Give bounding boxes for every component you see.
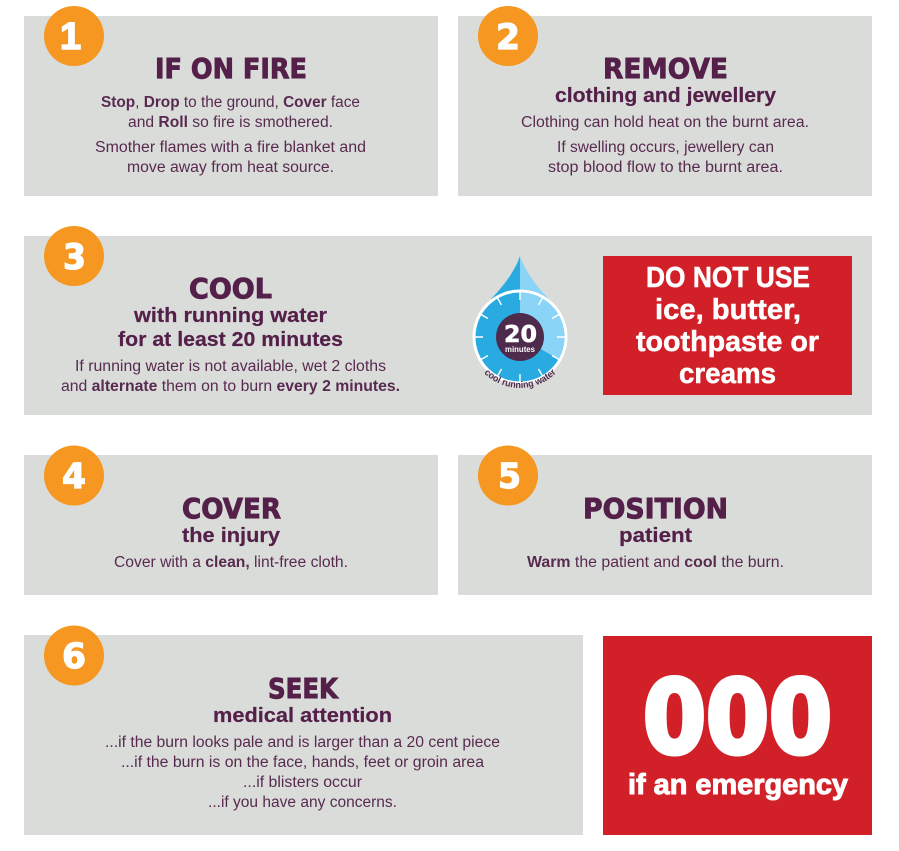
text: step 5 instructions: Warm the patient and cool the burn. [527,554,784,571]
subheading: medical attention: medical attention [213,704,392,727]
text: step 4 instructions: Cover with a clean, lint-free cloth. [114,554,348,571]
icon: number 1 badge: 1 [60,16,81,58]
heading: cover: COVER [182,492,281,525]
text: step 1 instructions: Smother flames with a fire blanket and [95,139,366,156]
icon: number 4 badge: 4 [62,457,86,497]
icon: number 6 badge: 6 [62,637,86,677]
icon: number 6 badge [44,626,104,686]
text: step 2 instructions: Clothing can hold heat on the burnt area. [521,114,809,131]
text: step 1 instructions [95,94,366,176]
text: step 6 instructions: ...if the burn is on the face, hands, feet or groin area [121,754,484,771]
text: step 3 instructions: If running water is not available, wet 2 cloths [75,358,386,375]
text: step 3 instructions: and alternate them on to burn every 2 minutes. [61,378,400,395]
callout: do not use: creams [679,358,776,390]
icon: water drop timer: minutes [505,344,535,354]
icon: number 3 badge [44,226,104,286]
heading: seek: SEEK [268,672,339,705]
text: step 1 instructions: move away from heat source. [127,159,334,176]
text: step 6 instructions: ...if blisters occur [243,774,362,791]
text: step 6 instructions: ...if you have any concerns. [208,794,397,811]
text: step 2 instructions [521,114,809,176]
subheading: patient: patient [619,524,692,547]
icon: number 2 badge: 2 [496,18,520,58]
subheading: the injury: the injury [182,524,281,547]
text: if an emergency: if an emergency [628,769,848,801]
number: 000: 000 [643,658,832,776]
icon: water drop timer: 20 [504,322,537,348]
icon: water drop timer [472,256,568,389]
heading: cool: COOL [189,272,272,305]
callout: do not use [603,256,852,395]
icon: number 5 badge [478,446,538,506]
text: step 2 instructions: If swelling occurs, jewellery can [557,139,774,156]
callout: do not use: ice, butter, [655,294,801,326]
icon: number 5 badge: 5 [498,457,521,497]
callout: 000 emergency [603,636,872,835]
text: step 6 instructions: ...if the burn looks pale and is larger than a 20 cent piece [105,734,500,751]
text: step 6 instructions [105,734,500,811]
panel: step 3 cool [24,226,872,415]
text: step 2 instructions: stop blood flow to the burnt area. [548,159,783,176]
icon: number 4 badge [44,446,104,506]
panel: step 6 seek [24,626,583,835]
icon: number 3 badge: 3 [63,238,86,278]
heading: position: POSITION [583,492,728,525]
panel: step 1 if on fire [24,6,438,196]
text: step 1 instructions: Stop, Drop to the ground, Cover face [101,94,360,111]
text: step 1 instructions: and Roll so fire is smothered. [128,114,333,131]
subheading: with running water: with running water [133,304,327,327]
panel: step 2 remove [458,6,872,196]
panel: step 5 position [458,446,872,595]
text: step 3 instructions [61,358,400,395]
subheading: with running water [118,304,343,351]
icon: water drop timer: cool running water [485,369,555,389]
callout: do not use: toothpaste or [636,326,819,358]
icon: number 2 badge [478,6,538,66]
heading: remove: REMOVE [603,52,728,85]
heading: if on fire: IF ON FIRE [155,52,307,85]
subheading: clothing and jewellery: clothing and jewellery [555,84,777,107]
panel: step 4 cover [24,446,438,595]
icon: number 1 badge [44,6,104,66]
callout: do not use: DO NOT USE [646,262,810,294]
subheading: with running water: for at least 20 minutes [118,328,343,351]
